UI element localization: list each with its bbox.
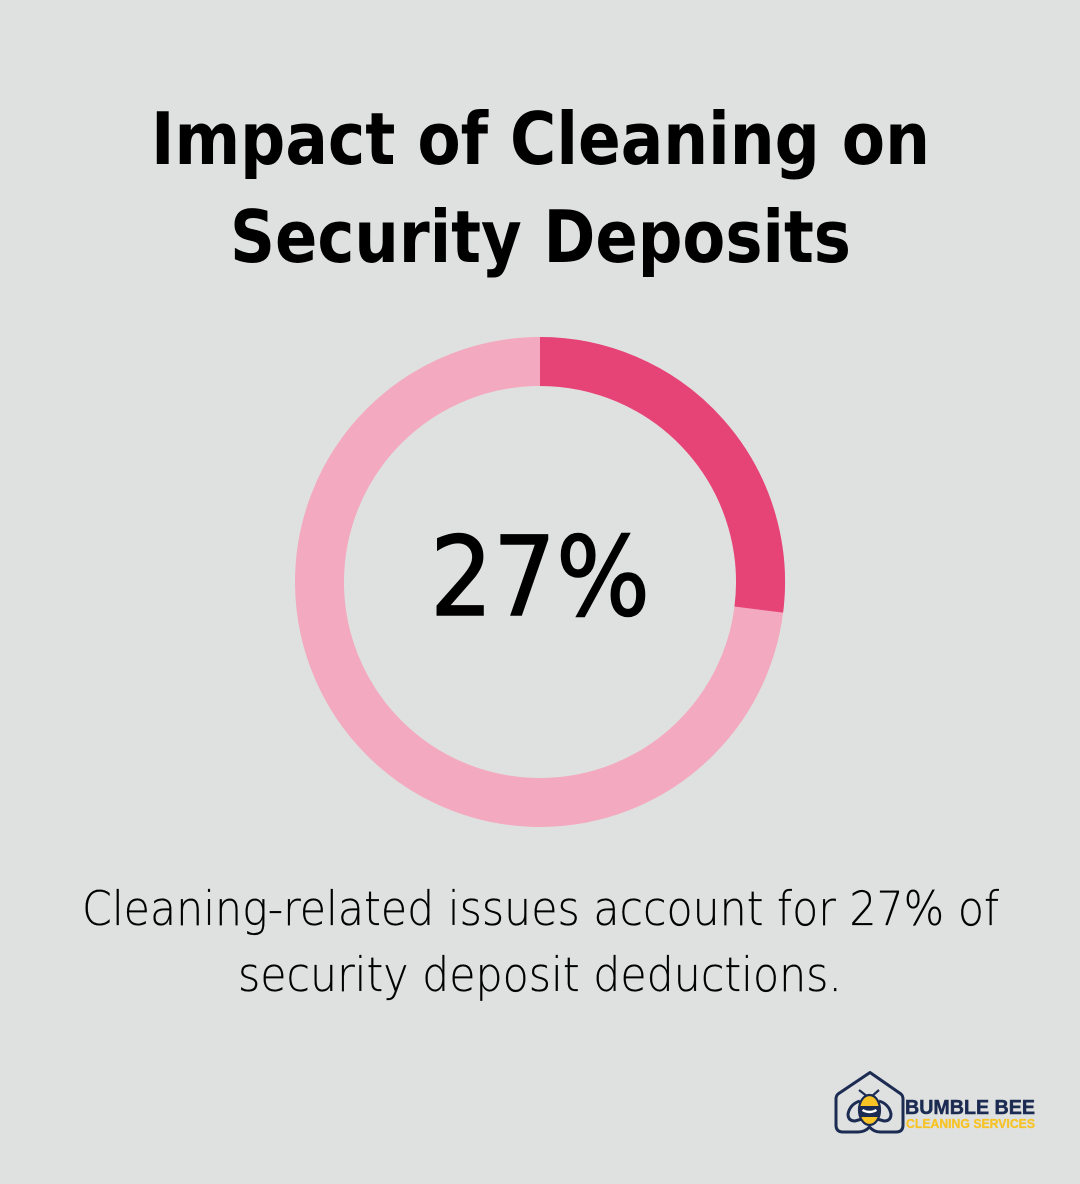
- icon: house with bee: [836, 1072, 903, 1132]
- title: Impact of Cleaning on: [151, 97, 930, 181]
- logo: Bumble Bee Cleaning Services: [836, 1072, 1035, 1132]
- logo tagline: CLEANING SERVICES: [906, 1117, 1035, 1131]
- title: [151, 97, 930, 279]
- description text: security deposit deductions.: [238, 948, 842, 1003]
- description text: Cleaning-related issues account for 27% of: [82, 882, 999, 937]
- center value: 27%: [430, 513, 650, 641]
- title: Security Deposits: [230, 195, 851, 279]
- description text: [82, 882, 999, 1003]
- logo wordmark: BUMBLE BEE: [905, 1096, 1035, 1119]
- donut chart: 27%: [320, 362, 761, 802]
